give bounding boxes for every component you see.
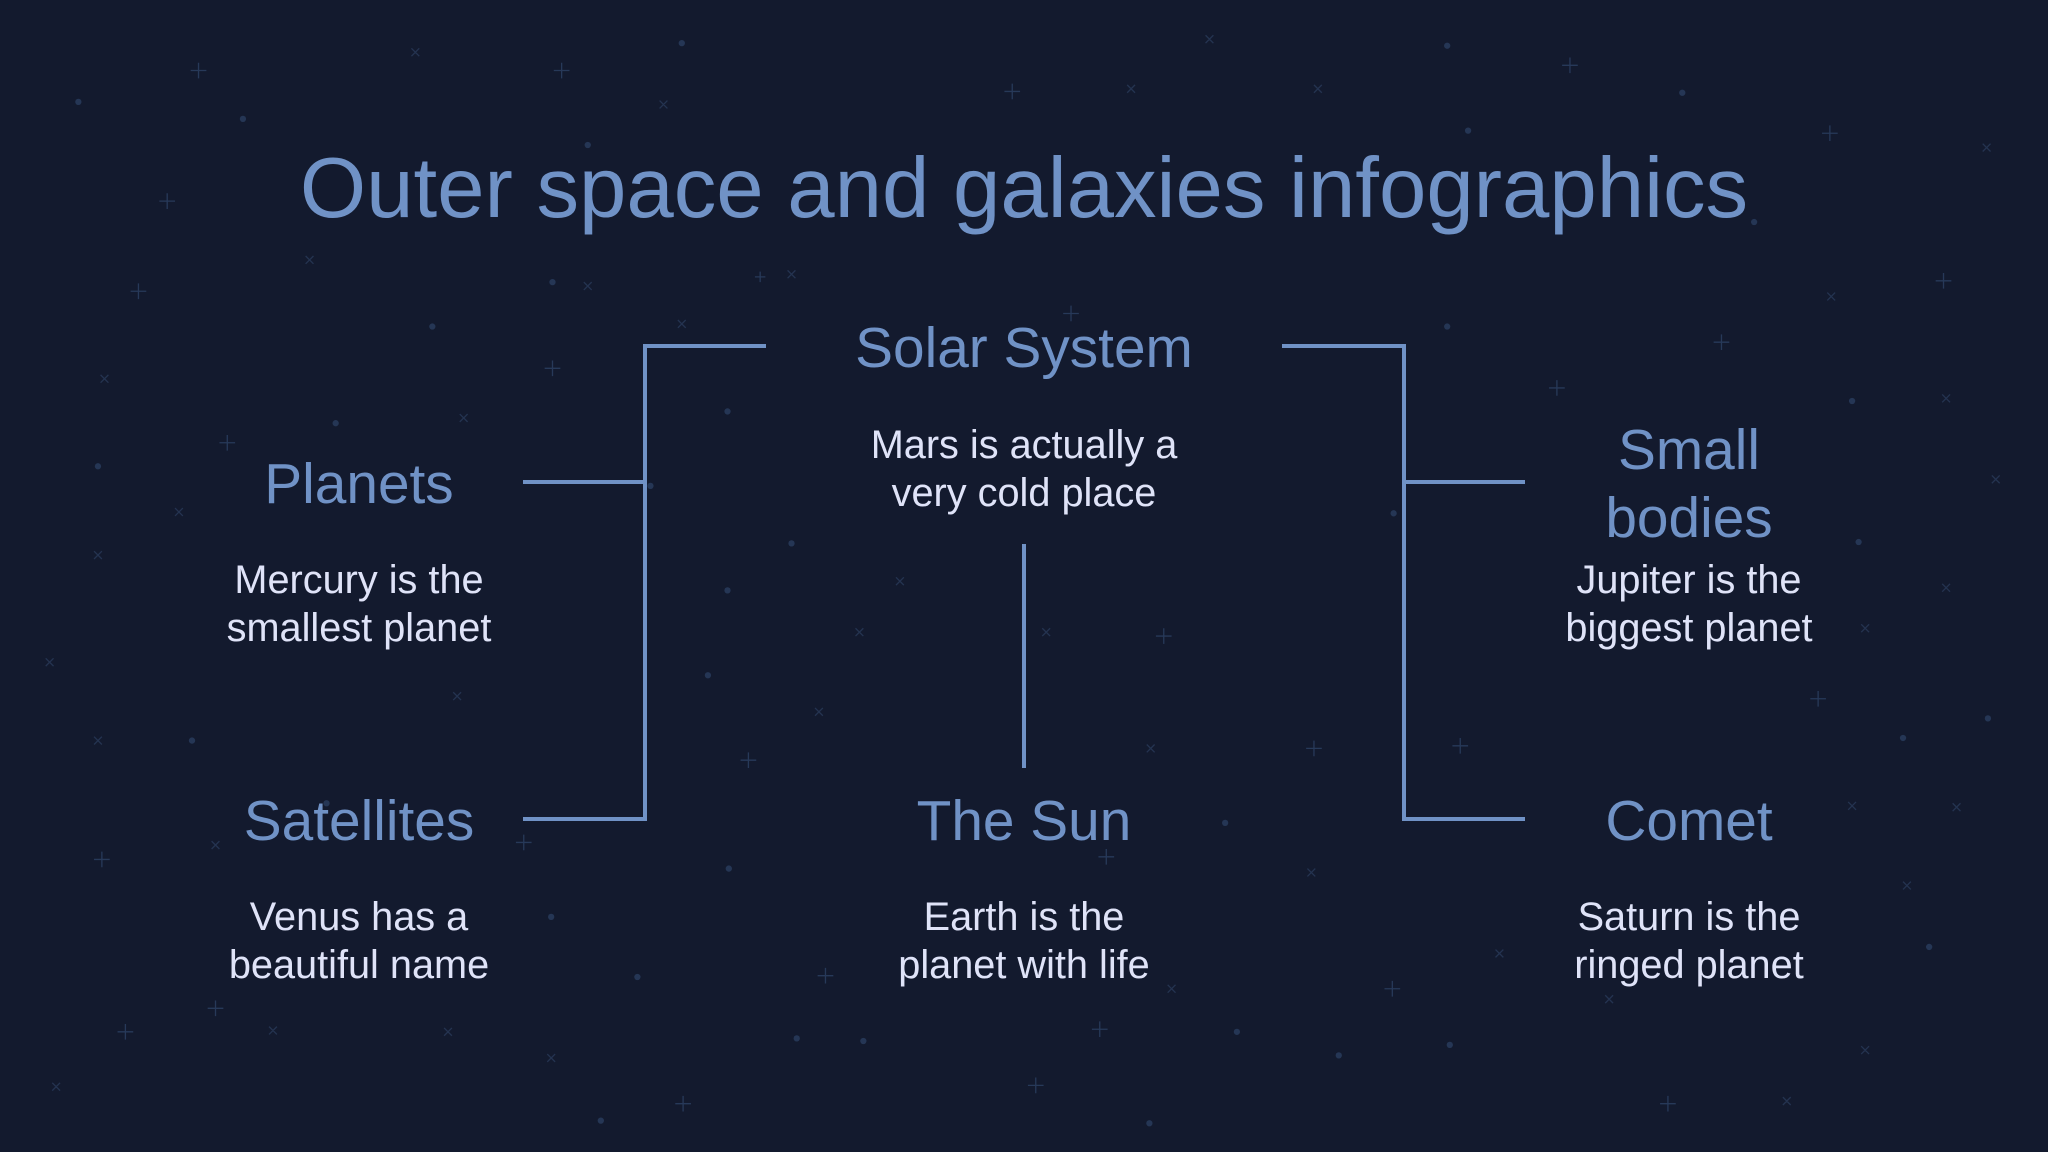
node: Satellites [229, 790, 489, 987]
node: The Sun [898, 790, 1150, 987]
node: Comet: ringed planet [1574, 943, 1804, 987]
node: Comet [1574, 790, 1804, 987]
node: The Sun: Earth is the [924, 895, 1124, 939]
node: Satellites: beautiful name [229, 943, 489, 987]
node: Solar System: very cold place [892, 471, 1156, 515]
center vertical connector [1022, 544, 1026, 768]
node: Solar System [855, 317, 1193, 515]
node: Planets: Planets [264, 453, 454, 516]
node: The Sun: planet with life [898, 943, 1150, 987]
node: Solar System: Mars is actually a [871, 423, 1177, 467]
node: Solar System: Solar System [855, 317, 1193, 380]
node: Small bodies: Jupiter is the [1576, 558, 1802, 602]
node: Planets: smallest planet [227, 606, 491, 650]
right bracket connector [1282, 346, 1525, 819]
node: Small bodies: bodies [1605, 487, 1773, 550]
node: Small bodies [1565, 419, 1813, 650]
left bracket connector [523, 346, 766, 819]
node: Satellites: Satellites [244, 790, 474, 853]
node: Small bodies: biggest planet [1565, 606, 1813, 650]
node: Comet: Comet [1605, 790, 1773, 853]
title: Outer space and galaxies infographics [300, 141, 1748, 236]
node: The Sun: The Sun [917, 790, 1131, 853]
node: Comet: Saturn is the [1578, 895, 1800, 939]
node: Small bodies: Small [1618, 419, 1760, 482]
node: Satellites: Venus has a [250, 895, 468, 939]
node: Planets: Mercury is the [234, 558, 484, 602]
node: Planets [227, 453, 492, 650]
